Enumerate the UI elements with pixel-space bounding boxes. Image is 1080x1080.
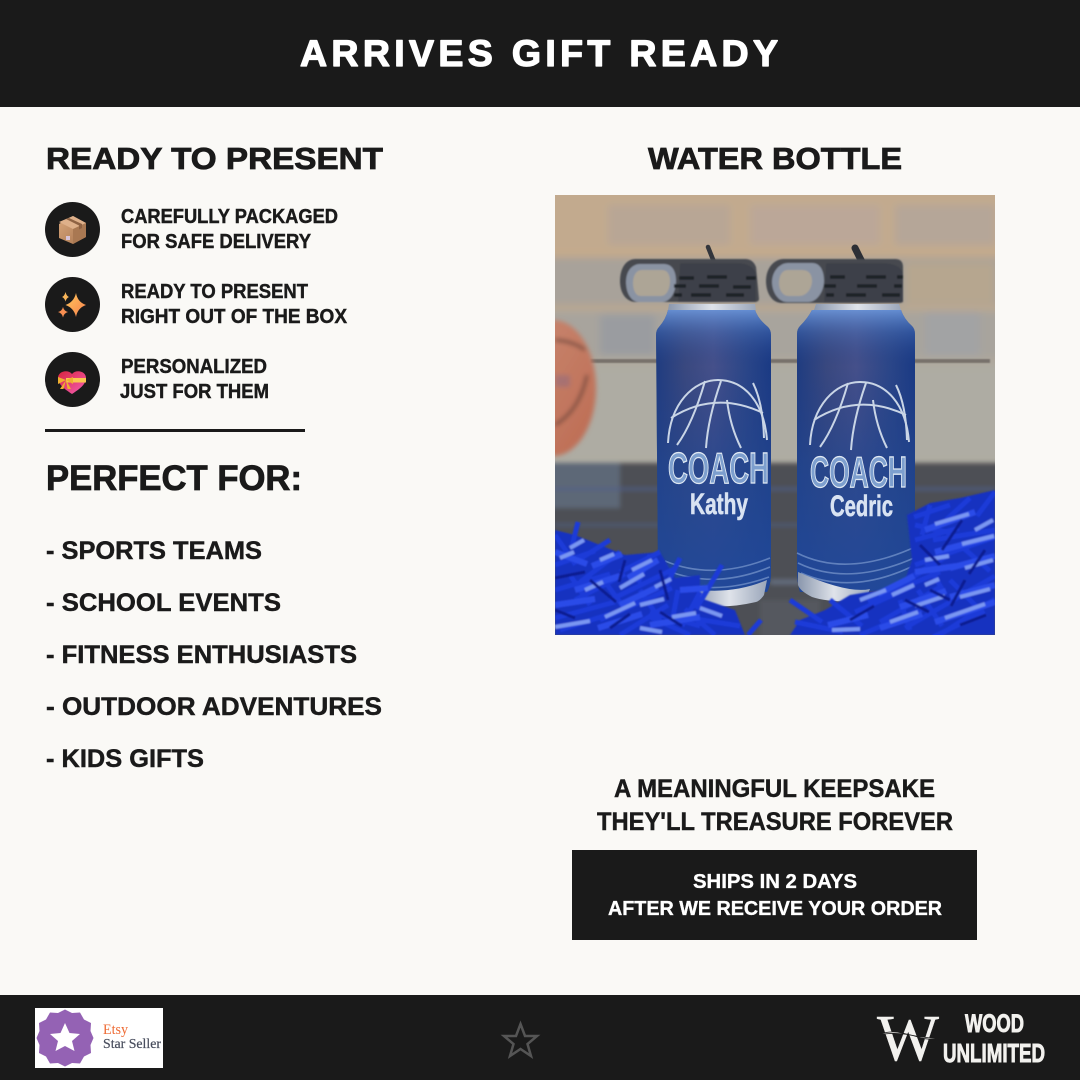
badge: etsy star seller (35, 1008, 163, 1068)
photo: two personalized water bottles (555, 195, 995, 635)
text: personalized (120, 356, 269, 403)
table top (545, 463, 1005, 643)
lid (766, 259, 903, 303)
lid (620, 259, 759, 302)
callout: shipping box (572, 850, 977, 940)
list: audiences (46, 537, 382, 773)
engraving: coach: COACH (810, 448, 907, 497)
engraving: basketball (810, 382, 909, 450)
icon: package (45, 202, 100, 257)
text: careful packaging: FOR SAFE DELIVERY (121, 231, 312, 253)
grooves (797, 547, 915, 583)
heading: ready to present: READY TO PRESENT (46, 141, 383, 176)
shredded paper: right pile (790, 490, 995, 637)
feature: careful packaging (45, 202, 338, 257)
badge: etsy star seller: Etsy (103, 1022, 128, 1038)
callout: shipping box: SHIPS IN 2 DAYS (693, 871, 857, 893)
title: ARRIVES GIFT READY (300, 32, 778, 74)
steel base (798, 572, 870, 602)
list: audiences: - SPORTS TEAMS (46, 537, 262, 565)
engraving: coach: COACH (668, 444, 769, 493)
steel base (692, 580, 767, 606)
callout: meaningful keepsake: A MEANINGFUL KEEPSAKE (614, 775, 935, 803)
basketball (555, 318, 598, 458)
straw (708, 247, 714, 262)
brick wall backdrop (555, 195, 995, 358)
panel: perfect for (46, 459, 382, 773)
text: ready out of the box (121, 281, 348, 328)
engraving: basketball (668, 380, 767, 448)
text: ready out of the box: RIGHT OUT OF THE BOX (121, 306, 348, 328)
icon: sparkles (45, 277, 100, 332)
text: ready out of the box: READY TO PRESENT (121, 281, 308, 303)
steel collar (668, 304, 756, 310)
logo: wood unlimited: W (877, 1002, 940, 1075)
body (797, 310, 915, 592)
panel: ready to present (45, 141, 383, 407)
list: audiences: - KIDS GIFTS (46, 745, 204, 773)
text: careful packaging: CAREFULLY PACKAGED (121, 206, 338, 228)
logo: wood unlimited: WOOD (965, 1010, 1024, 1038)
feature: personalized (45, 352, 269, 407)
logo: wood unlimited (877, 1002, 1045, 1075)
icon: outlined star (504, 1024, 537, 1056)
list: audiences: - FITNESS ENTHUSIASTS (46, 641, 357, 669)
body (656, 310, 771, 592)
list: audiences: - SCHOOL EVENTS (46, 589, 281, 617)
heading: perfect for: PERFECT FOR: (46, 459, 302, 498)
shredded paper: left pile (555, 522, 761, 635)
steel collar (814, 304, 901, 310)
badge: etsy star seller: Star Seller (103, 1037, 161, 1052)
text: personalized: JUST FOR THEM (120, 381, 269, 403)
callout: meaningful keepsake: THEY'LL TREASURE FOREVER (597, 808, 953, 836)
straw (855, 248, 862, 262)
bottle: Kathy (620, 247, 771, 606)
header band (0, 0, 1080, 107)
feature: ready out of the box (45, 277, 348, 332)
bottle: Cedric (766, 248, 915, 602)
callout: shipping box: AFTER WE RECEIVE YOUR ORDER (608, 898, 943, 920)
grooves (665, 558, 770, 588)
callout: meaningful keepsake (597, 775, 953, 836)
text: careful packaging (121, 206, 338, 253)
icon: gift heart (45, 352, 100, 407)
heading: water bottle: WATER BOTTLE (648, 141, 902, 176)
engraving: name: Kathy (690, 488, 748, 521)
engraving: name: Cedric (830, 490, 893, 523)
list: audiences: - OUTDOOR ADVENTURES (46, 693, 382, 721)
footer band (0, 995, 1080, 1080)
text: personalized: PERSONALIZED (121, 356, 267, 378)
